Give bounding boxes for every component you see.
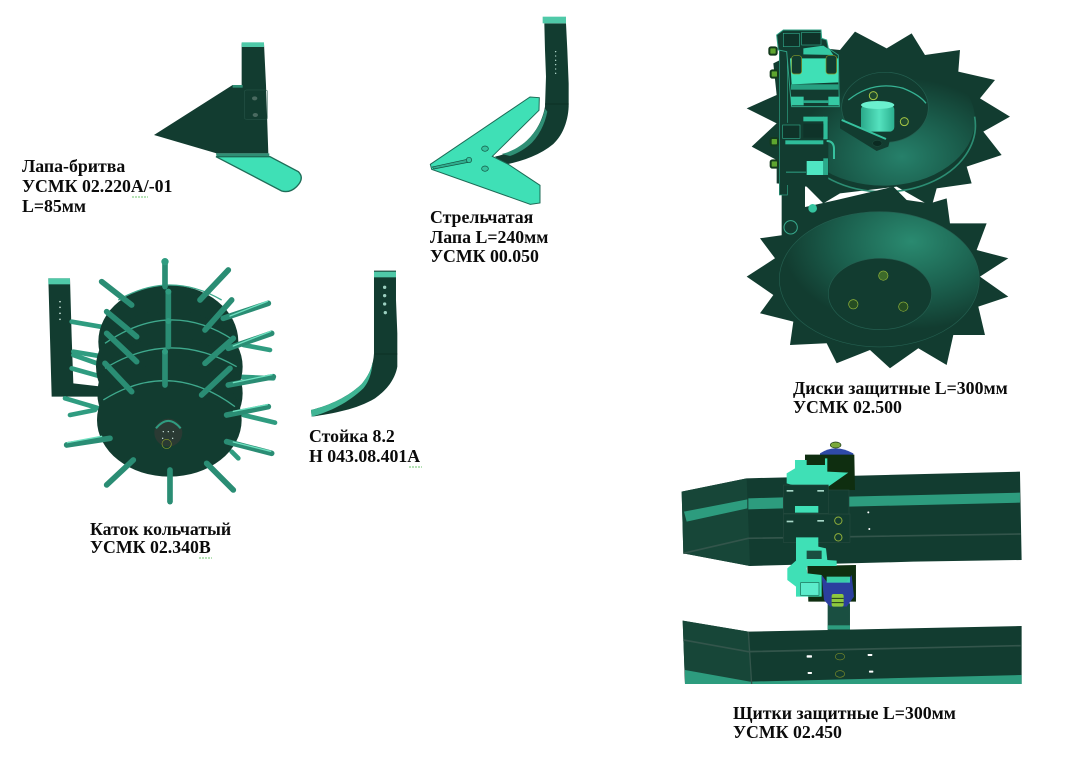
text: protective shields label [733, 703, 956, 742]
lower shield [683, 621, 1022, 684]
icon: razor paw part [154, 42, 301, 192]
icon: protective shields [682, 442, 1022, 684]
text: protective discs label: Диски защитные L=300мм [793, 378, 1008, 398]
text: stand label: Стойка 8.2 [309, 426, 395, 446]
discs [747, 32, 1010, 368]
text: razor paw label: Лапа-бритва [22, 156, 125, 176]
text: ring roller label [90, 519, 231, 558]
text: protective discs label [793, 378, 1008, 417]
shank [495, 17, 569, 165]
text: stand label: Н 043.08.401А [309, 446, 420, 466]
text: protective shields label: Щитки защитные L=300мм [733, 703, 956, 723]
hub and bracket [769, 30, 908, 195]
text: sweep paw label: Стрельчатая [430, 207, 534, 227]
text: razor paw label [22, 156, 172, 216]
text: razor paw label: УСМК 02.220А/-01 [22, 176, 172, 196]
upper shield [682, 472, 1022, 566]
text: stand label [309, 426, 422, 467]
text: ring roller label: УСМК 02.340В [90, 537, 211, 557]
text: ring roller label: Каток кольчатый [90, 519, 231, 539]
icon: ring roller [48, 258, 275, 502]
text: sweep paw label: Лапа L=240мм [430, 227, 548, 247]
text: sweep paw label: УСМК 00.050 [430, 246, 539, 266]
text: razor paw label: L=85мм [22, 196, 86, 216]
clamp assembly [828, 603, 850, 630]
icon: protective discs [747, 30, 1010, 368]
icon: sweep paw with shank [430, 17, 569, 204]
paw [430, 97, 540, 204]
text: protective discs label: УСМК 02.500 [793, 397, 902, 417]
text: sweep paw label [430, 207, 548, 266]
icon: shank stand 8.2 [311, 271, 397, 417]
text: protective shields label: УСМК 02.450 [733, 722, 842, 742]
